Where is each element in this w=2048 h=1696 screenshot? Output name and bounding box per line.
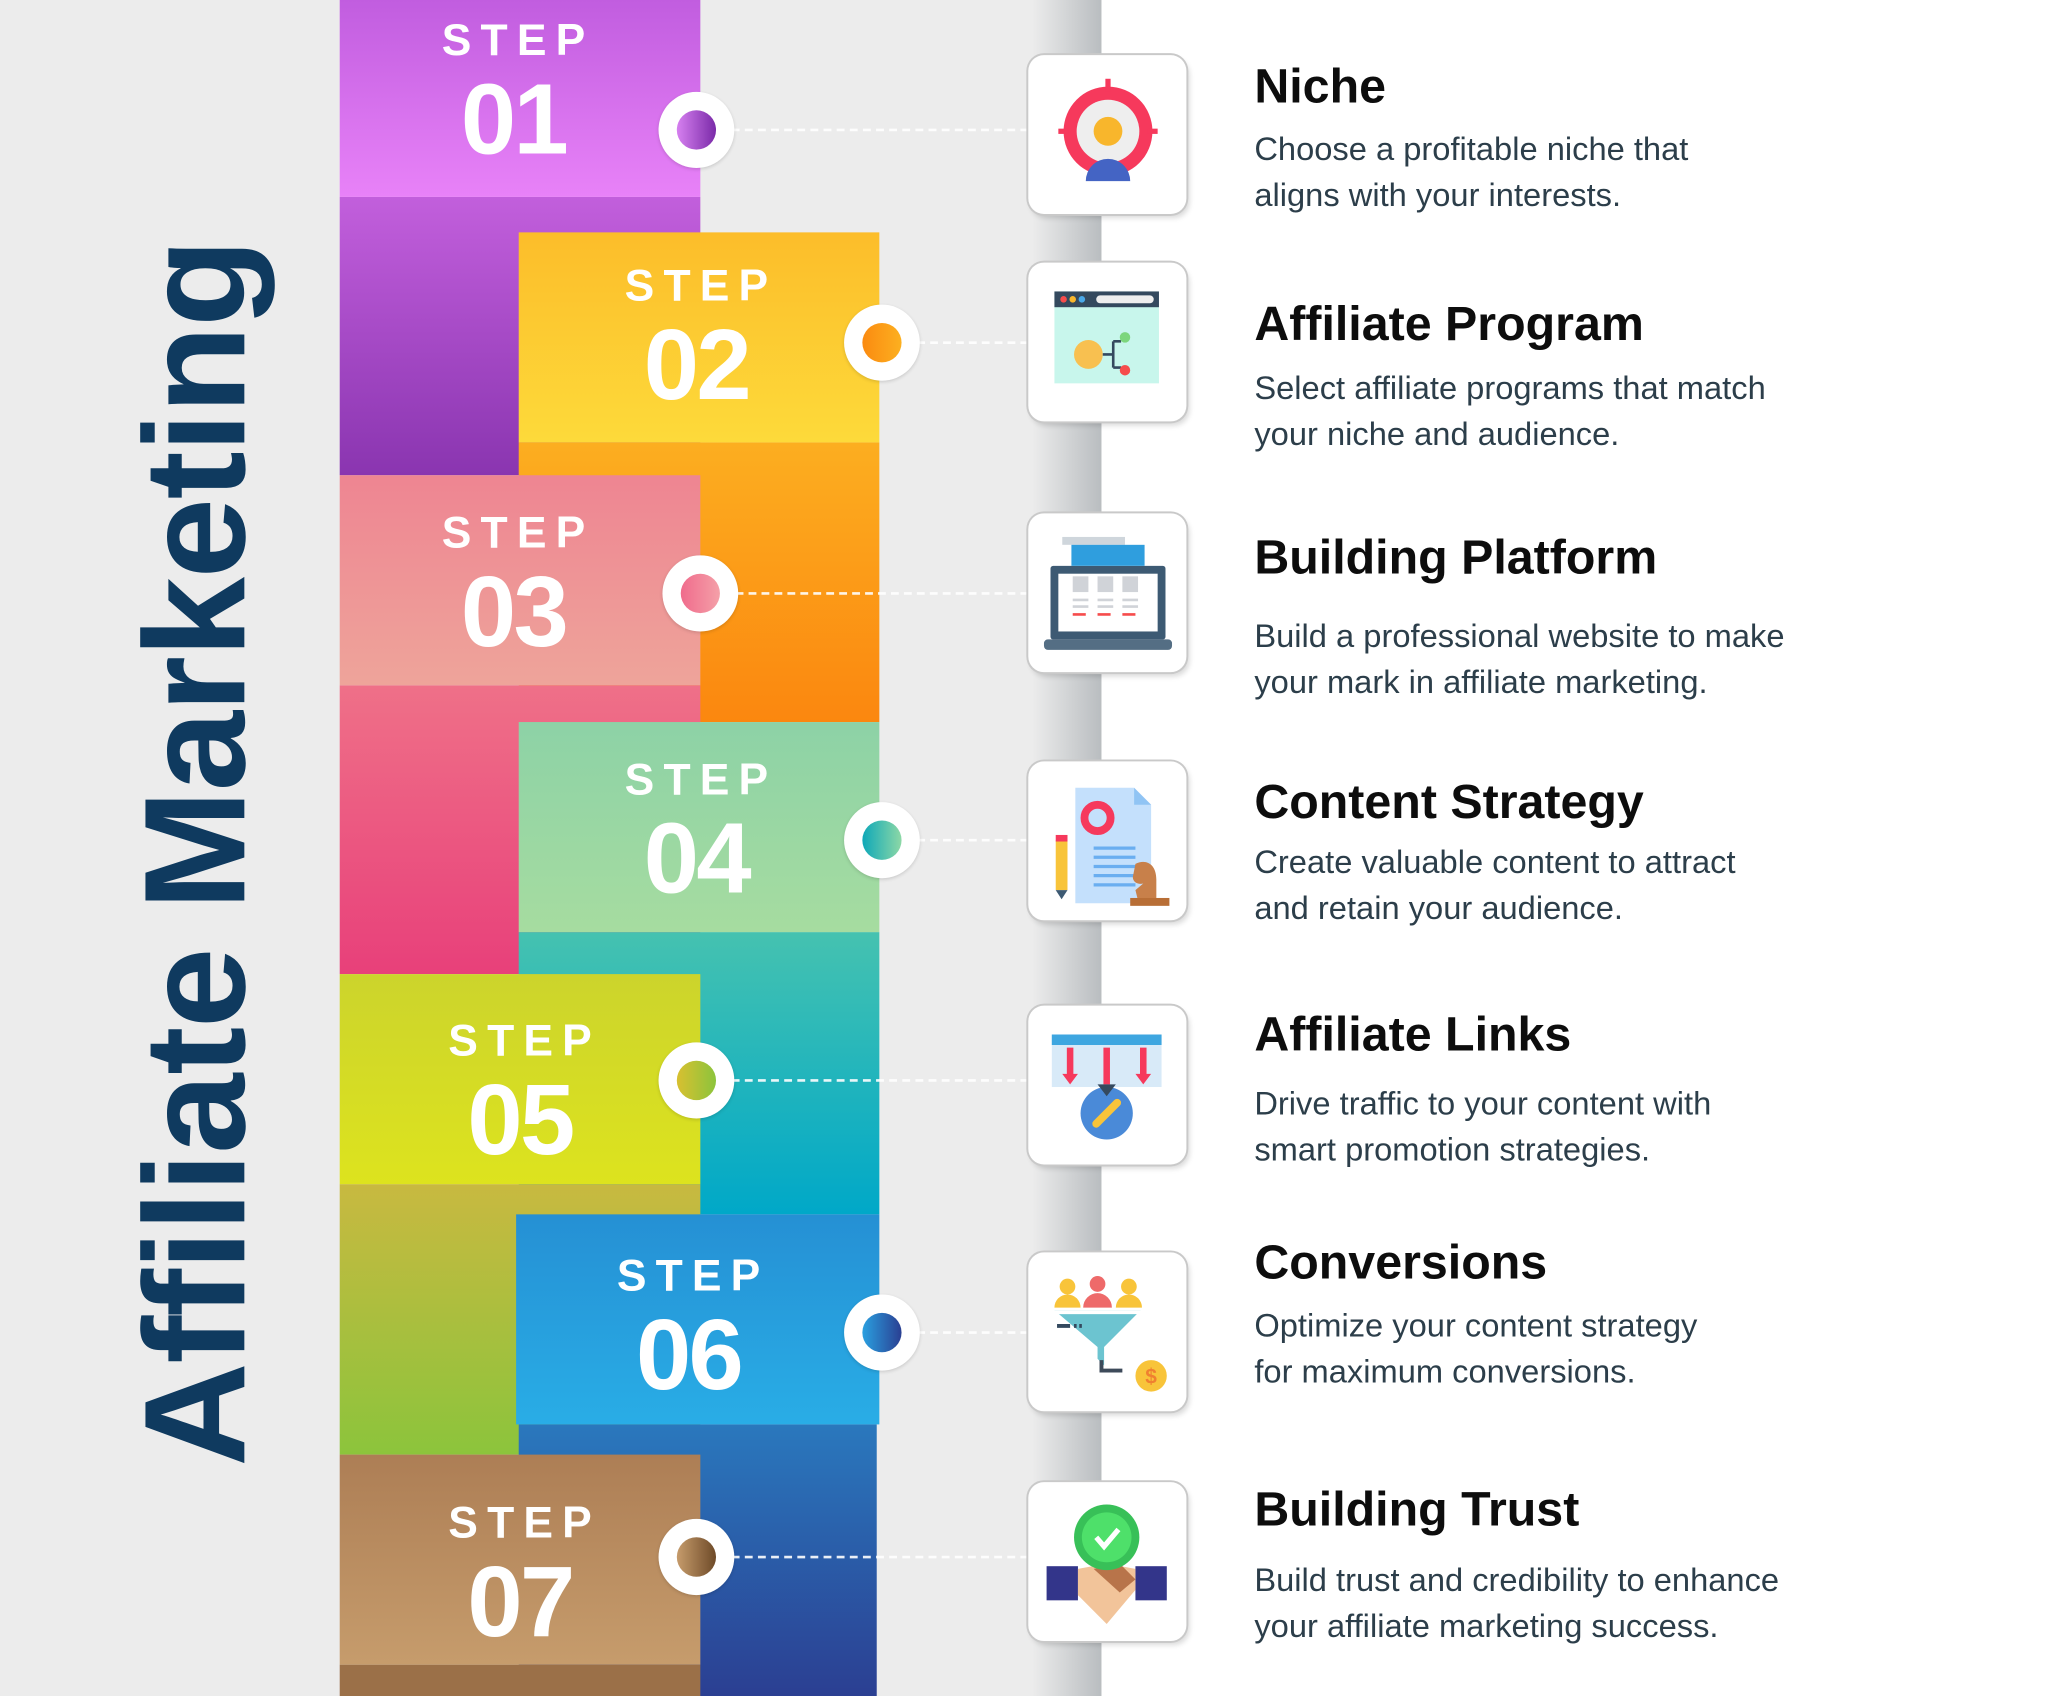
step 07: 07 xyxy=(467,1547,573,1658)
text: Building Trust: your affiliate marketing success. xyxy=(1254,1608,1719,1645)
text: Affiliate Links: Affiliate Links xyxy=(1254,1007,1571,1061)
step 06: STEP xyxy=(617,1251,769,1301)
text: Niche: Choose a profitable niche that xyxy=(1254,131,1688,168)
step 03 xyxy=(340,475,700,685)
text: Conversions: for maximum conversions. xyxy=(1254,1354,1636,1390)
step 04 xyxy=(519,722,879,932)
step 02: 02 xyxy=(644,310,749,421)
text: Niche: Niche xyxy=(1254,59,1386,113)
step 02: STEP xyxy=(625,261,777,311)
step 05 xyxy=(340,974,700,1184)
icon: affiliate program xyxy=(1028,263,1186,421)
text: Affiliate Links: smart promotion strategies. xyxy=(1254,1132,1650,1168)
text: Affiliate Program xyxy=(1254,297,1766,453)
text: Conversions: Conversions xyxy=(1254,1235,1547,1289)
step 02 xyxy=(519,232,879,442)
text: Conversions: Optimize your content strategy xyxy=(1254,1308,1697,1344)
step 07: STEP xyxy=(448,1498,601,1548)
text: Building Trust xyxy=(1254,1482,1779,1645)
step column background strips xyxy=(340,197,880,1696)
text: Building Trust: Building Trust xyxy=(1254,1482,1579,1536)
step 04: STEP xyxy=(625,755,777,805)
text: Niche: aligns with your interests. xyxy=(1254,177,1621,214)
step 03: 03 xyxy=(461,557,566,668)
step 05: STEP xyxy=(448,1016,601,1066)
text: Building Platform: your mark in affiliate marketing. xyxy=(1254,664,1708,701)
step 06 xyxy=(516,1214,879,1424)
title: Affiliate Marketing: Affiliate Marketing xyxy=(115,240,276,1467)
text: Building Platform: Build a professional website to make xyxy=(1254,618,1785,655)
text: Niche xyxy=(1254,59,1688,214)
step 03: STEP xyxy=(442,508,594,558)
icon: conversions funnel xyxy=(1028,1252,1186,1411)
text: Conversions xyxy=(1254,1235,1698,1390)
text: Content Strategy: Create valuable content to attract xyxy=(1254,844,1736,881)
icon: conversions funnel: $ xyxy=(1145,1366,1157,1389)
step 06: 06 xyxy=(636,1300,741,1411)
icon: niche target xyxy=(1028,55,1186,214)
text: Affiliate Links xyxy=(1254,1007,1711,1168)
text: Content Strategy xyxy=(1254,775,1736,927)
text: Building Trust: Build trust and credibility to enhance xyxy=(1254,1562,1779,1599)
step 01: 01 xyxy=(461,64,566,176)
icon: building trust xyxy=(1028,1482,1186,1641)
step 07 xyxy=(340,1455,700,1665)
step 01 xyxy=(340,0,700,197)
text: Affiliate Program: Select affiliate programs that match xyxy=(1254,370,1766,407)
step 05: 05 xyxy=(467,1065,573,1176)
icon: affiliate links xyxy=(1028,1006,1186,1164)
step 04: 04 xyxy=(644,803,749,915)
text: Affiliate Program: your niche and audience. xyxy=(1254,416,1619,453)
text: Affiliate Program: Affiliate Program xyxy=(1254,297,1644,351)
connector lines xyxy=(732,129,1028,131)
text: Content Strategy: Content Strategy xyxy=(1254,775,1644,828)
icon: building platform laptop xyxy=(1028,513,1186,672)
dots xyxy=(659,92,734,168)
icon: content strategy xyxy=(1028,761,1186,920)
step 01: STEP xyxy=(442,16,594,66)
text: Building Platform xyxy=(1254,530,1785,701)
text: Building Platform: Building Platform xyxy=(1254,530,1657,584)
text: Content Strategy: and retain your audience. xyxy=(1254,890,1623,927)
text: Affiliate Links: Drive traffic to your content with xyxy=(1254,1086,1711,1122)
